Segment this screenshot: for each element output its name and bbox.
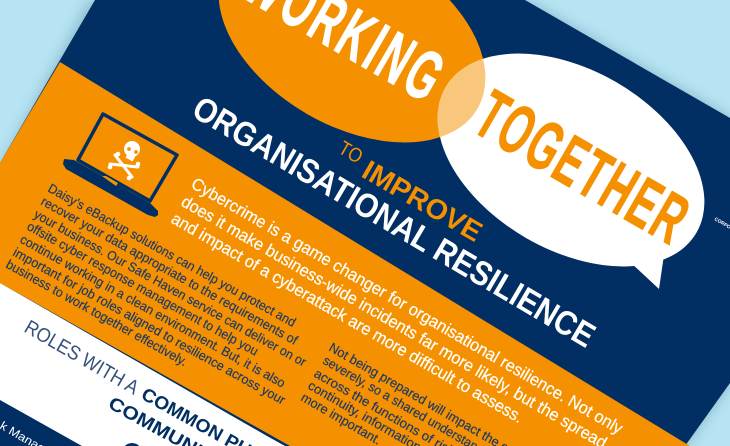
text block: ebackup solutions (4, 181, 310, 408)
text block: ebackup solutions: your business. Our Safe Haven service can deliver on or (32, 207, 310, 370)
bubble overlap (438, 59, 486, 137)
icon: laptop with skull (63, 114, 177, 217)
text block: ebackup solutions: important for job roles aligned to resilience across your (11, 245, 289, 408)
heading: roles with a common purpose (20, 316, 255, 446)
text block: cybercrime intro: Cybercrime is a game changer for organisational resilience. Not only (188, 174, 627, 438)
text block: ebackup solutions: offsite cyber response management to help you (25, 219, 261, 359)
heading: improve: IMPROVE (357, 154, 488, 248)
speech bubble: working (181, 0, 523, 186)
text block: ebackup solutions: recover your data appropriate to the requirements of (39, 194, 301, 348)
title: together: TOGETHER (462, 77, 703, 260)
text block: cybercrime intro: and impact of a cyberattack are more difficult to assess. (168, 209, 527, 427)
text block: ebackup solutions: business to work together effectively. (4, 257, 190, 369)
heading: organisational resilience: ORGANISATIONAL RESILIENCE (186, 89, 602, 355)
text block: ebackup solutions: Daisy’s eBackup solutions can help you protect and (46, 181, 299, 330)
panel: white roles band (0, 283, 285, 446)
speech bubble: together (400, 10, 730, 310)
heading: roles with a common purpose: ROLES WITH A (20, 316, 143, 400)
partial icon at bottom edge (122, 443, 142, 446)
text block: ebackup solutions: continue working in a clean environment. But, it is also (18, 232, 288, 391)
heading: to: TO (334, 137, 366, 168)
